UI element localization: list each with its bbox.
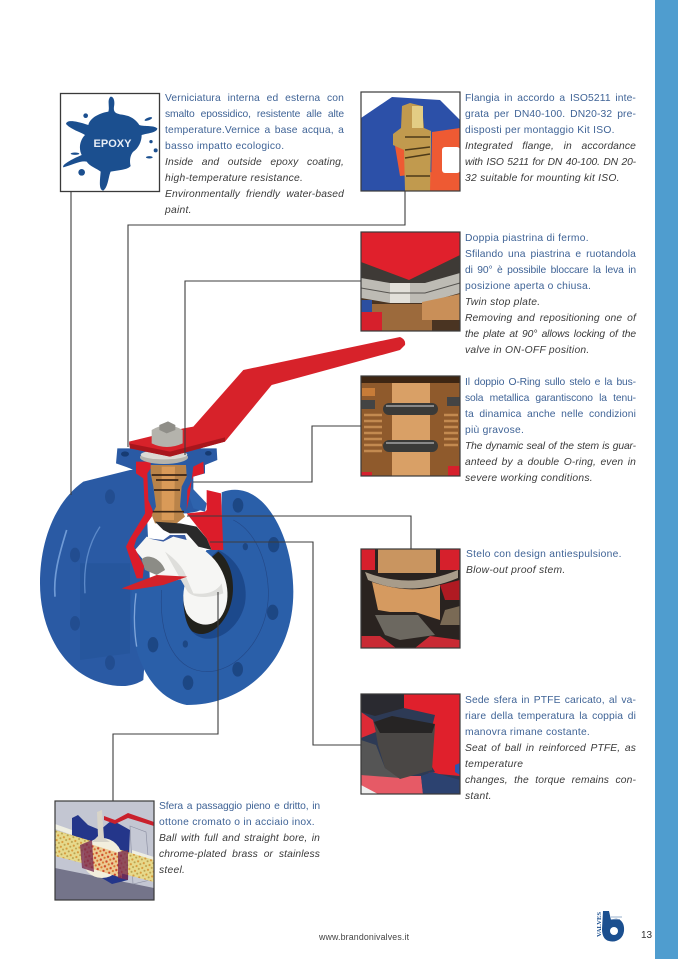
text: stem	[466, 549, 622, 576]
text: o-ring: The dynamic seal of the stem is guar-	[465, 441, 636, 452]
leader: flange	[128, 191, 405, 447]
text: twin stop plate: posizione aperta o chiusa.	[465, 281, 591, 292]
front flange	[131, 490, 293, 705]
text: o-ring	[465, 377, 636, 484]
text: flange: Integrated flange, in accordance	[465, 141, 636, 152]
text: flange: grata per DN40-100. DN20-32 pre-	[465, 109, 636, 120]
leader: o-ring	[193, 426, 361, 482]
seat shadow	[155, 522, 212, 550]
text: flange	[465, 93, 636, 184]
text: ball: Sfera a passaggio pieno e dritto, in	[159, 801, 320, 812]
handle	[129, 337, 405, 457]
leader: seat	[210, 542, 361, 745]
text: epoxy: temperature.Vernice a base acqua, a	[165, 125, 344, 136]
bore	[183, 550, 246, 639]
text: flange: Flangia in accordo a ISO5211 inte-	[465, 93, 636, 104]
text: twin stop plate	[465, 233, 637, 356]
text: twin stop plate: the plate at 90° allows locking of the	[465, 329, 636, 340]
text: epoxy: high-temperature resistance.	[165, 173, 303, 184]
footer url: www.brandonivalves.it	[319, 932, 409, 942]
frame: ball	[55, 801, 154, 900]
rear flange	[40, 470, 150, 686]
text: epoxy: Verniciatura interna ed esterna con	[165, 93, 344, 104]
text: seat: stant.	[465, 791, 492, 802]
photo: ball cross-section	[55, 801, 154, 900]
text: ball: chrome-plated brass or stainless	[159, 849, 320, 860]
frame: seat	[361, 694, 460, 794]
text: epoxy: paint.	[165, 205, 192, 216]
bolt holes	[70, 489, 279, 690]
leader: twin stop plate	[185, 281, 361, 455]
text: epoxy	[164, 93, 344, 216]
stem	[151, 465, 187, 523]
text: o-ring: severe working conditions.	[465, 473, 593, 484]
text: ball: ottone cromato o in acciaio inox.	[159, 817, 315, 828]
text: o-ring: più gravose.	[465, 425, 524, 436]
text: epoxy: Environmentally friendly water-based	[165, 189, 344, 200]
frame: twin stop plate	[361, 232, 460, 331]
text: o-ring: sola metallica garantiscono la tenu-	[465, 393, 636, 404]
photo: o-ring detail	[361, 376, 460, 476]
icon: epoxy splash	[60, 94, 160, 192]
text: ball: Ball with full and straight bore, in	[159, 833, 320, 844]
text: flange: disposti per montaggio Kit ISO.	[465, 125, 615, 136]
flange lug hole	[121, 451, 129, 457]
ball	[135, 535, 228, 625]
photo: twin stop plate	[361, 232, 460, 331]
leader: ball	[113, 592, 218, 801]
text: ball	[159, 801, 320, 876]
text: epoxy: smalto epossidico, resistente alle alte	[165, 109, 344, 120]
text: twin stop plate: Twin stop plate.	[465, 297, 540, 308]
text: epoxy: Inside and outside epoxy coating,	[165, 157, 344, 168]
frame: stem	[361, 549, 460, 648]
washer	[140, 451, 188, 464]
frame: flange	[361, 92, 460, 191]
text: twin stop plate: Removing and repositioning one of	[465, 313, 636, 324]
text: ball: steel.	[159, 865, 185, 876]
text: seat: Sede sfera in PTFE caricato, al va-	[465, 695, 636, 706]
text: stem: Stelo con design antiespulsione.	[466, 549, 622, 560]
text: seat: temperature	[465, 759, 523, 770]
logo text: VALVES	[596, 912, 603, 937]
text: seat: Seat of ball in reinforced PTFE, as	[465, 743, 636, 754]
text: o-ring: anteed by a double O-ring, even in	[465, 457, 636, 468]
text: epoxy: basso impatto ecologico.	[165, 141, 284, 152]
red section	[126, 462, 154, 578]
photo: seat detail	[361, 694, 460, 794]
text: seat	[465, 695, 636, 802]
text: twin stop plate: Sfilando una piastrina e ruotandola	[465, 249, 636, 260]
photo: flange detail	[361, 92, 460, 191]
text: flange: with ISO 5211 for DN 40-100. DN 20-	[465, 157, 636, 168]
logo	[596, 911, 624, 942]
text: seat: riare della temperatura la coppia di	[465, 711, 636, 722]
neck body	[116, 448, 217, 513]
text: seat: changes, the torque remains con-	[465, 775, 636, 786]
text: flange: 32 suitable for mounting kit ISO.	[465, 173, 620, 184]
text: twin stop plate: valve in ON-OFF position.	[465, 345, 590, 356]
text: o-ring: ta dinamica anche nelle condizioni	[465, 409, 636, 420]
text: o-ring: Il doppio O-Ring sullo stelo e la bus-	[465, 377, 636, 388]
photo: stem detail	[361, 549, 460, 648]
valve illustration	[40, 337, 405, 705]
text: twin stop plate: Doppia piastrina di fermo.	[465, 233, 589, 244]
page number: 13	[641, 930, 652, 941]
leader lines	[71, 191, 411, 801]
text: twin stop plate: di 90° è possibile bloccare la leva in	[465, 265, 636, 276]
epoxy label: EPOXY	[94, 138, 132, 150]
leader: stem	[187, 516, 411, 549]
text: seat: manovra rimane costante.	[465, 727, 590, 738]
sidebar band	[655, 0, 678, 959]
frame: o-ring	[361, 376, 460, 476]
stem nut	[152, 425, 183, 447]
leader: epoxy	[70, 191, 72, 495]
text: stem: Blow-out proof stem.	[466, 565, 565, 576]
